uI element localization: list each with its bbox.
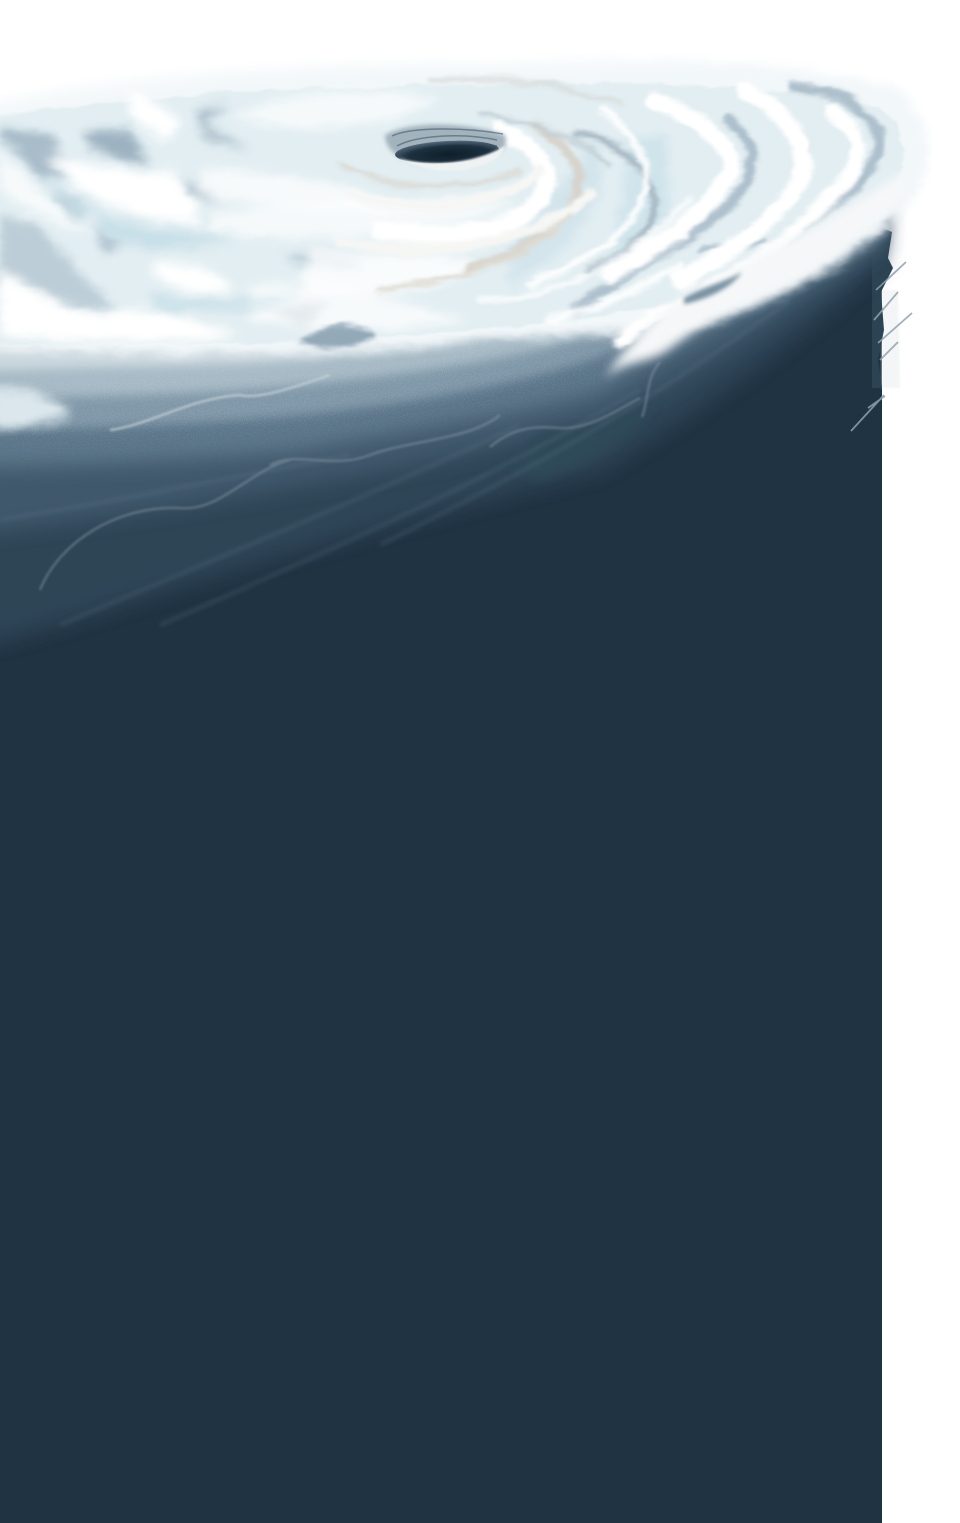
dark navy panel (0, 225, 882, 1523)
shading: mid blue-gray band (0, 200, 882, 468)
shading: pale band (0, 180, 882, 400)
dark cloud bump (515, 400, 655, 480)
soft streaks in the lower fade (0, 300, 790, 625)
eye: dark opening (394, 138, 500, 166)
left pale rim highlight (110, 375, 330, 430)
shading: deep blue fade (0, 200, 882, 650)
shading: pale rim band (0, 170, 882, 372)
cloud bump shadow (297, 326, 378, 348)
left gray patches (0, 105, 368, 325)
eye: surrounding swirl wall (385, 124, 506, 165)
beige inner spiral arcs (340, 79, 620, 290)
eye: wall streaks (392, 129, 503, 152)
speckle texture (0, 270, 760, 455)
cloud: pale blue body (0, 83, 903, 345)
cloud disc (0, 55, 928, 428)
eye: lower cloud lip (398, 146, 505, 171)
rim shadow patch (684, 272, 742, 304)
shading: slate band (0, 200, 882, 535)
right gray-blue spiral bands (575, 87, 879, 335)
light blue washes (40, 125, 670, 310)
storm shading layers (0, 170, 882, 650)
right rough edge with brush streaks (851, 225, 912, 431)
right white spiral bands (480, 90, 858, 340)
left bottom white patch (0, 387, 72, 428)
cloud: soft top haze (0, 55, 928, 353)
thin highlight contours on the dark cloud bumps (40, 362, 660, 590)
left white cloud masses (0, 90, 520, 342)
shading: light gray-blue band (0, 190, 882, 432)
right lower white rim (605, 172, 912, 378)
top haze fade (0, 30, 960, 110)
hurricane eye (385, 124, 506, 171)
